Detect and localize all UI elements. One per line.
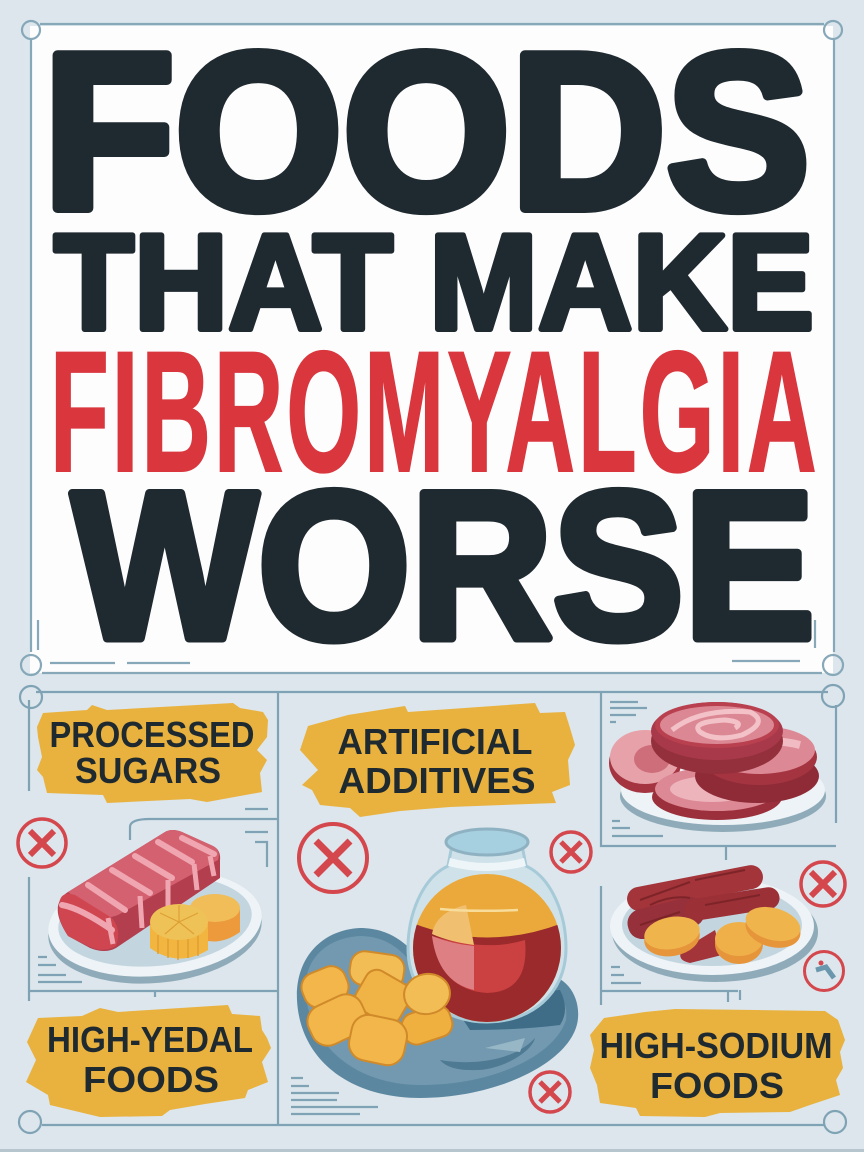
meat block [58, 830, 220, 951]
food panel frame lines [19, 685, 846, 1133]
panel: high-sodium foods label: FOODS [650, 1065, 784, 1106]
blue plate [297, 928, 578, 1098]
panel: high-sodium foods label: HIGH-SODIUM [600, 1025, 832, 1066]
title: FIBROMYALGIA: FIBROMYALGIA [50, 316, 817, 508]
nuggets [297, 949, 456, 1068]
left slice [609, 730, 681, 793]
icon: red ring with tap [804, 952, 844, 990]
sausages [625, 863, 781, 942]
icon: red cross left [18, 819, 66, 867]
title: WORSE: WORSE [72, 448, 815, 683]
right slice [695, 726, 819, 803]
panel: processed sugars label [37, 703, 268, 803]
panel: artificial additives label [300, 703, 575, 817]
panel: high-sodium foods label [590, 1009, 845, 1117]
title panel [21, 21, 843, 675]
panel: artificial additives label: ADDITIVES [338, 760, 536, 801]
bottom slice [652, 767, 782, 820]
panel: high-yedal foods label [26, 1005, 271, 1117]
panel: processed sugars label: SUGARS [75, 750, 221, 791]
illustration: meat block and sugar rounds on plate [44, 830, 266, 992]
panel: high-yedal foods label: HIGH-YEDAL [47, 1019, 253, 1060]
illustration: rolled meat slices on plate [609, 702, 826, 832]
top slice [651, 702, 783, 774]
panel: artificial additives label: ARTIFICIAL [338, 721, 532, 762]
icon: large red cross [299, 824, 367, 892]
sugar rounds [150, 894, 240, 960]
illustration: sausages and potatoes on plate [610, 863, 818, 982]
illustration: blue plate with nuggets and jar [297, 829, 578, 1098]
icon: red cross right [801, 862, 845, 906]
potatoes [641, 901, 805, 964]
glass jar [405, 829, 570, 1025]
panel: processed sugars label: PROCESSED [50, 714, 254, 755]
title: THAT MAKE: THAT MAKE [54, 206, 814, 358]
panel: high-yedal foods label: FOODS [83, 1059, 219, 1100]
icon: red cross beside jar [551, 832, 591, 872]
title: FOODS: FOODS [43, 8, 810, 256]
icon: red cross below plate [530, 1072, 570, 1112]
